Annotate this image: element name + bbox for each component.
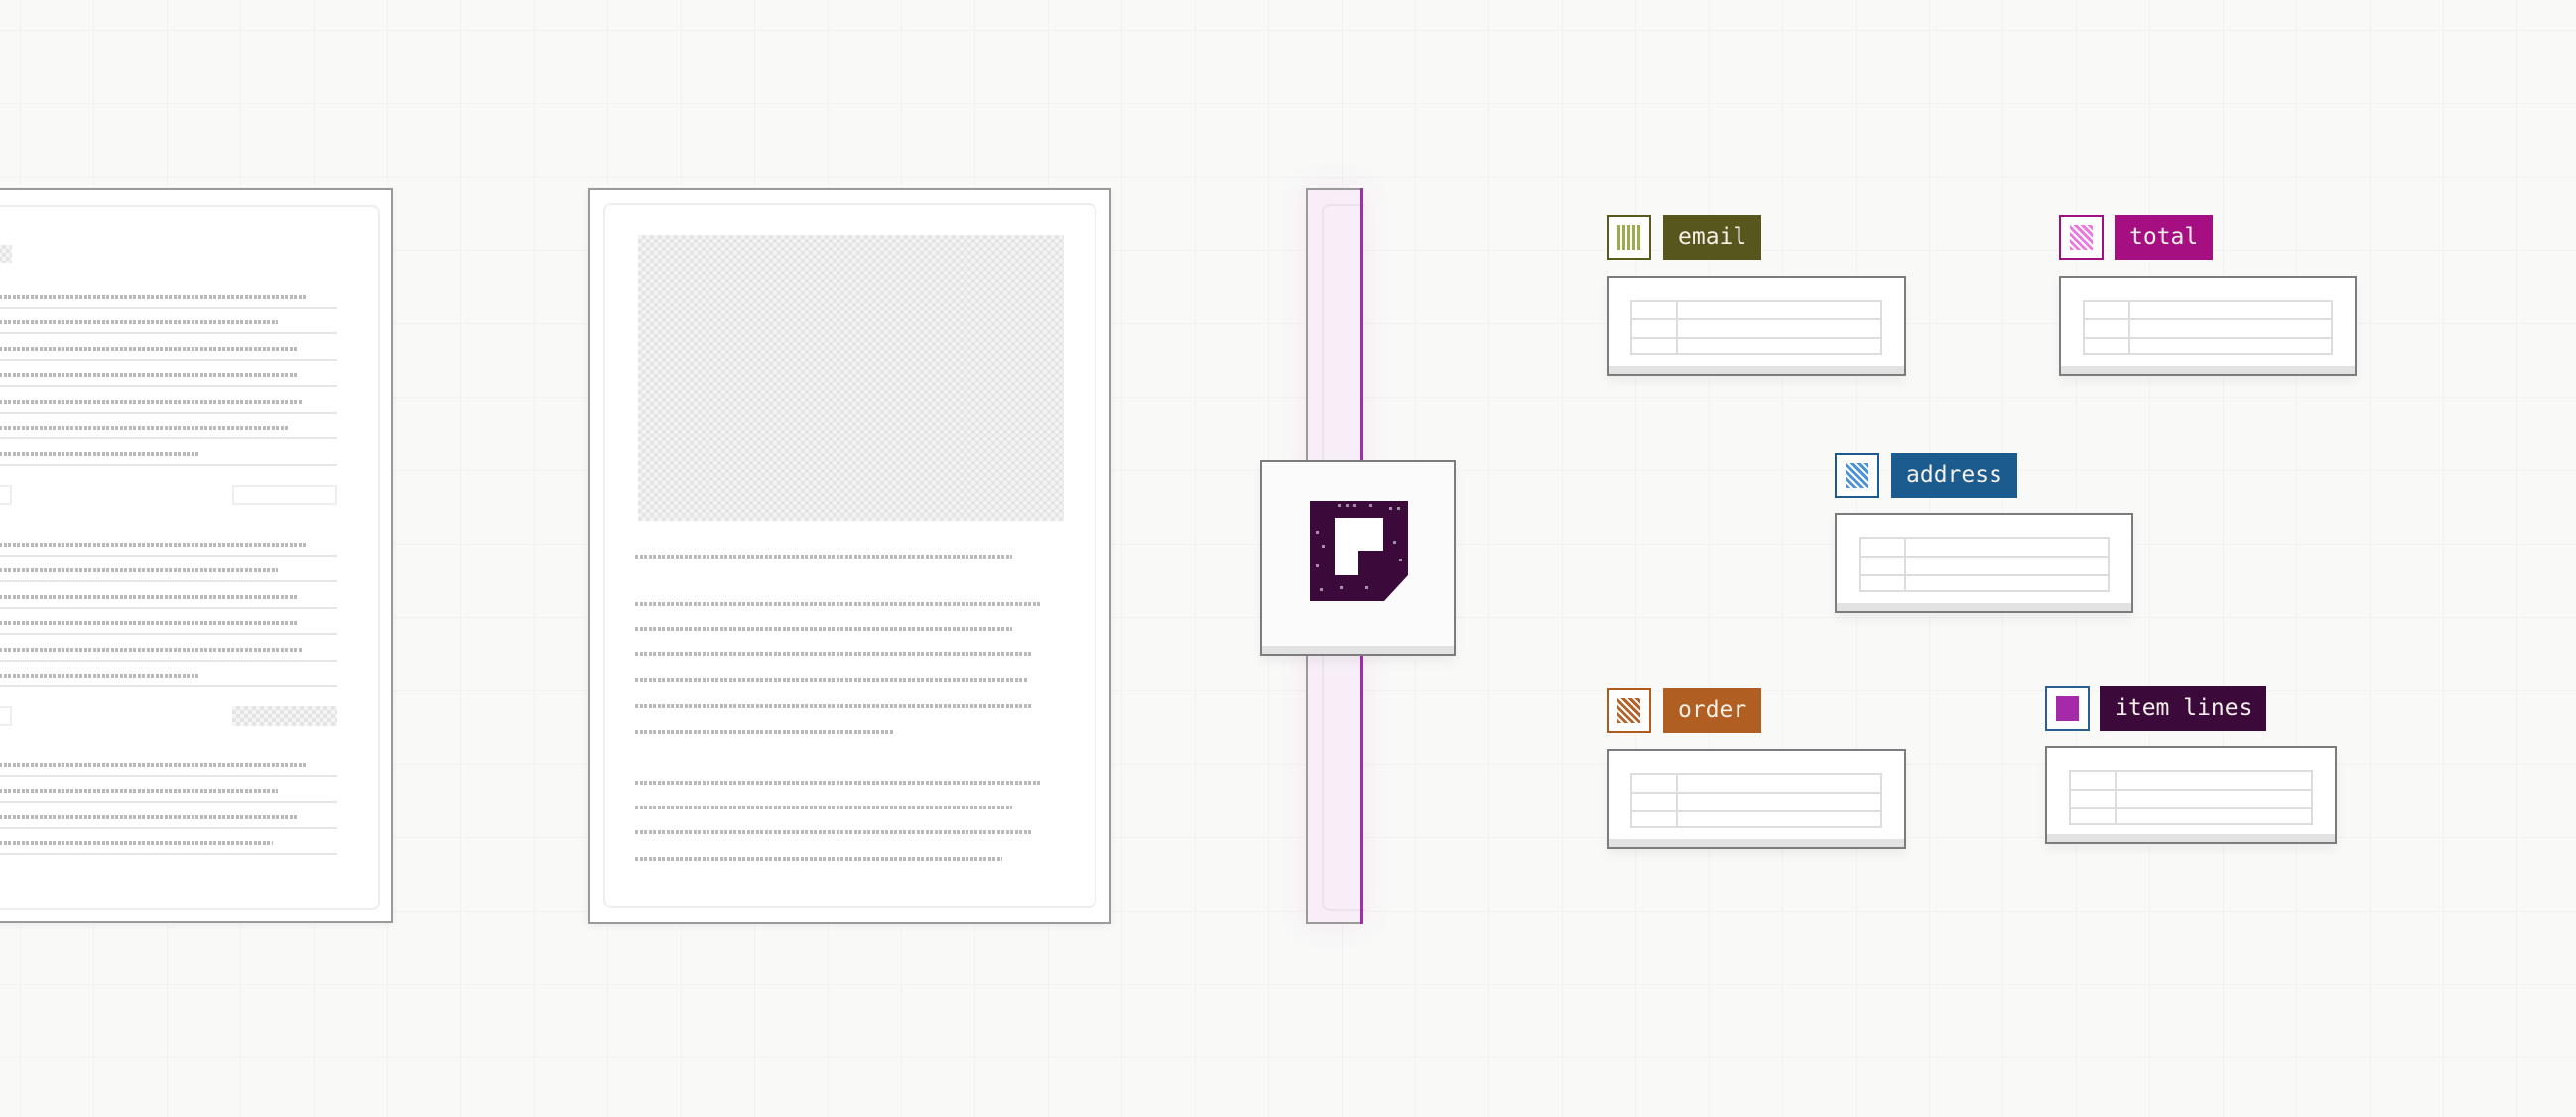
document: scanning (partial) bbox=[1306, 188, 1363, 924]
label: order: order bbox=[1678, 697, 1746, 723]
icon: email pattern bbox=[1607, 215, 1651, 260]
badge: order bbox=[1607, 688, 1761, 733]
icon: order pattern bbox=[1607, 688, 1651, 733]
image placeholder bbox=[638, 235, 1064, 521]
label: total bbox=[2115, 215, 2213, 260]
card: email fields bbox=[1607, 276, 1906, 376]
card: total fields bbox=[2059, 276, 2357, 376]
inner card bbox=[0, 205, 380, 910]
icon: item lines pattern bbox=[2045, 686, 2090, 731]
card: order fields bbox=[1607, 749, 1906, 849]
label: email: email bbox=[1678, 224, 1746, 250]
badge: address bbox=[1835, 453, 2017, 498]
badge: item lines bbox=[2045, 686, 2266, 731]
label: item lines bbox=[2100, 686, 2266, 731]
icon: extractor logo box bbox=[1260, 460, 1456, 656]
card: address fields bbox=[1835, 513, 2133, 613]
inner card bbox=[603, 203, 1096, 908]
document: middle article bbox=[588, 188, 1111, 924]
label: total: total bbox=[2129, 224, 2198, 250]
label: address: address bbox=[1906, 462, 2002, 488]
label: email bbox=[1663, 215, 1761, 260]
badge: total bbox=[2059, 215, 2213, 260]
label: item lines: item lines bbox=[2115, 695, 2252, 721]
icon: address pattern bbox=[1835, 453, 1879, 498]
document: left form bbox=[0, 188, 393, 923]
label: order bbox=[1663, 688, 1761, 733]
icon: total pattern bbox=[2059, 215, 2104, 260]
card: item lines fields bbox=[2045, 746, 2337, 844]
badge: email bbox=[1607, 215, 1761, 260]
label: address bbox=[1891, 453, 2017, 498]
